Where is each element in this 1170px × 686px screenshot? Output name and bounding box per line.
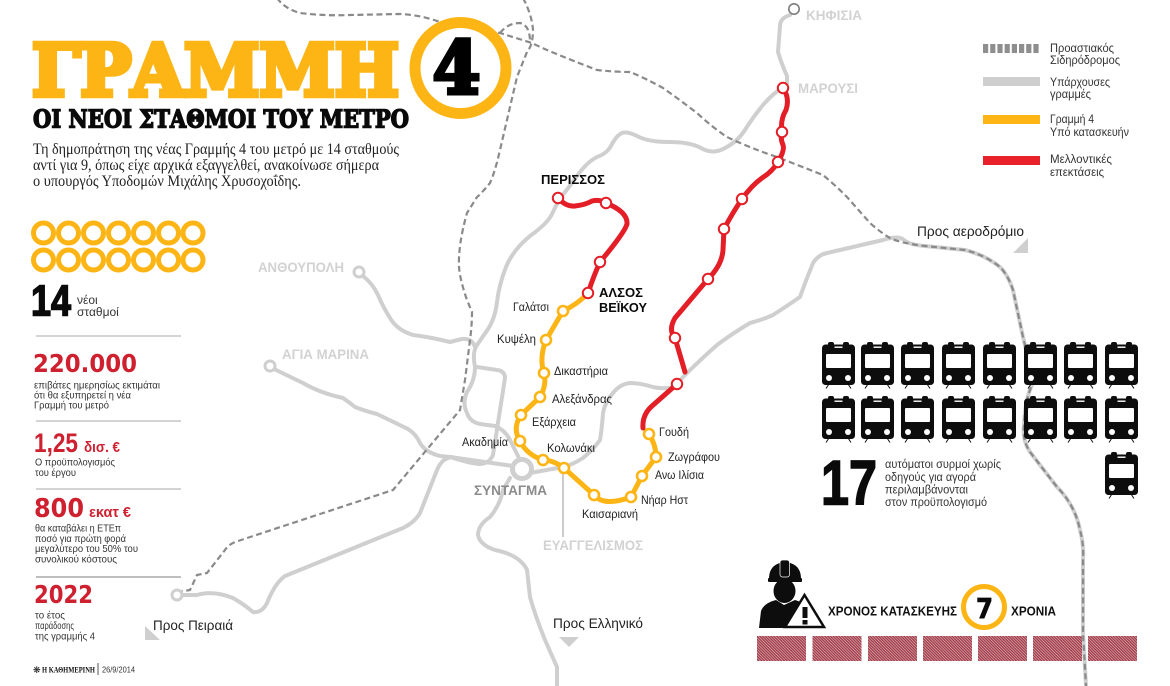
legend: Προαστιακός	[1050, 43, 1114, 55]
years label: ΧΡΟΝΙΑ	[1011, 604, 1056, 618]
stat: 1,25 bn budget: δισ. €	[84, 439, 121, 456]
map station labels: ΑΓΙΑ ΜΑΡΙΝΑ	[282, 346, 369, 362]
leader line: Evangelismos	[562, 470, 564, 537]
label: Peiraias direction with arrow	[145, 617, 233, 640]
map: future extensions (red)	[553, 83, 788, 428]
legend: Σιδηρόδρομος	[1050, 55, 1120, 67]
map station labels: Γουδή	[659, 425, 689, 439]
subtitle: ΟΙ ΝΕΟΙ ΣΤΑΘΜΟΙ ΤΟΥ ΜΕΤΡΟ	[33, 104, 409, 134]
ring with number 7: 7	[976, 592, 993, 625]
map station labels: Αλεξάνδρας	[552, 392, 612, 406]
map: Line 4 under construction (yellow)	[515, 293, 661, 502]
stat: 220.000 passengers: επιβάτες ημερησίως εκτιμάται	[34, 380, 161, 392]
seven year blocks	[757, 636, 1137, 661]
stat: 17 automatic trains: περιλαμβάνονται	[885, 482, 968, 496]
stat: 220.000 passengers: ότι θα εξυπηρετεί η νέα	[34, 390, 131, 402]
map station labels: ΠΕΡΙΣΣΟΣ	[541, 173, 606, 187]
icon: construction worker with warning sign	[759, 560, 824, 628]
map: existing metro lines	[181, 15, 1086, 686]
map station labels: ΚΗΦΙΣΙΑ	[806, 7, 862, 23]
footer: newspaper credit: 26/9/2014	[102, 664, 135, 674]
stat: 800 million: θα καταβάλει η ΕΤΕπ	[35, 522, 121, 534]
map station labels: Κολωνάκι	[547, 441, 595, 455]
stat: 800 million: 800	[34, 494, 84, 524]
footer: newspaper credit: Η ΚΑΘΗΜΕΡΙΝΗ	[42, 664, 95, 674]
stat: 1,25 bn budget: 1,25	[34, 428, 78, 458]
stat: 800 million: εκατ €	[89, 504, 132, 521]
stat: 17 automatic trains: αυτόματοι συρμοί χωρίς	[885, 457, 1001, 471]
label: Peiraias direction with arrow: Προς Πειραιά	[153, 617, 233, 633]
label: airport direction with arrow	[917, 223, 1028, 253]
map station labels: Καισαριανή	[582, 507, 638, 521]
intro paragraph: αντί για 9, όπως είχε αρχικά εξαγγελθεί, ανακοίνωσε σήμερα	[33, 157, 379, 174]
map station labels: ΕΥΑΓΓΕΛΙΣΜΟΣ	[543, 537, 643, 553]
stat: 17 automatic trains: 17	[821, 448, 877, 518]
label: Elliniko direction with arrow: Προς Ελληνικό	[553, 615, 643, 631]
stat: 800 million: μεγαλύτερο του 50% του	[35, 543, 138, 555]
label: airport direction with arrow: Προς αεροδρόμιο	[917, 223, 1024, 239]
stat: 220.000 passengers: 220.000	[33, 349, 137, 378]
footer: newspaper credit	[33, 663, 135, 676]
stat: delivery year 2022	[34, 580, 95, 642]
icon group: 17 trains	[822, 342, 1138, 498]
stat: 14 new stations: 14	[31, 276, 71, 326]
stat: 1,25 bn budget	[34, 428, 121, 479]
stat: 800 million	[34, 494, 138, 566]
stat: delivery year 2022: το έτος	[35, 610, 65, 622]
icon: 14 station rings	[34, 223, 203, 270]
map station labels: ΑΝΘΟΥΠΟΛΗ	[258, 259, 344, 275]
map station labels: ΜΑΡΟΥΣΙ	[798, 80, 858, 96]
footer: newspaper credit: ❋	[33, 666, 41, 676]
legend: Υπό κατασκευήν	[1050, 127, 1129, 139]
legend: Γραμμή 4	[1050, 114, 1095, 126]
map station labels: Ακαδημία	[462, 435, 508, 449]
map: suburban railway dashed lines	[178, 0, 1086, 686]
stat: 220.000 passengers	[33, 349, 161, 412]
map station labels	[258, 7, 862, 553]
stat: 17 automatic trains: οδηγούς για αγορά	[885, 470, 976, 484]
map station labels: ΣΥΝΤΑΓΜΑ	[474, 482, 547, 498]
legend: Υπάρχουσες	[1050, 77, 1110, 89]
stat: delivery year 2022: της γραμμής 4	[35, 630, 95, 642]
stat: 14 new stations: νέοι	[77, 293, 98, 307]
stat: 14 new stations	[31, 276, 119, 326]
map station labels: Ζωγράφου	[668, 450, 720, 464]
stat: 17 automatic trains: στον προϋπολογισμό	[885, 495, 987, 509]
legend: επεκτάσεις	[1050, 167, 1104, 179]
legend: γραμμές	[1050, 89, 1091, 101]
map station labels: ΒΕΪΚΟΥ	[599, 300, 647, 315]
title ring with number 4: 4	[432, 26, 480, 112]
terminal stations of existing lines	[172, 4, 799, 600]
intro paragraph: ο υπουργός Υποδομών Μιχάλης Χρυσοχοΐδης.	[33, 173, 301, 190]
map station labels: Ανω Ιλίσια	[655, 468, 704, 482]
stat: 800 million: ποσό για πρώτη φορά	[35, 533, 126, 545]
station: Syntagma hub	[512, 460, 532, 478]
map station labels: Κυψέλη	[497, 332, 536, 346]
stat: 1,25 bn budget: του έργου	[35, 467, 76, 479]
title: ΓΡΑΜΜΗ	[32, 28, 399, 112]
stat: 800 million: συνολικού κόστους	[35, 554, 117, 566]
legend	[983, 43, 1129, 179]
title ring with number 4	[415, 22, 506, 114]
intro paragraph: Τη δημοπράτηση της νέας Γραμμής 4 του μετρό με 14 σταθμούς	[33, 141, 399, 158]
map station labels: Δικαστήρια	[554, 364, 608, 378]
stat: 14 new stations: σταθμοί	[77, 305, 119, 319]
intro paragraph	[33, 141, 399, 190]
stat: 1,25 bn budget: Ο προϋπολογισμός	[35, 456, 115, 468]
ring with number 7	[964, 586, 1004, 628]
map station labels: ΑΛΣΟΣ	[599, 285, 643, 300]
label: Elliniko direction with arrow	[553, 615, 643, 647]
stat: delivery year 2022: παράδοσης	[35, 620, 74, 632]
construction time label: ΧΡΟΝΟΣ ΚΑΤΑΣΚΕΥΗΣ	[828, 604, 957, 618]
map station labels: Νήαρ Ηστ	[641, 493, 688, 507]
stat: 17 automatic trains	[821, 448, 1001, 518]
stat: 220.000 passengers: Γραμμή του μετρό	[34, 400, 109, 412]
legend: Μελλοντικές	[1050, 154, 1112, 166]
map station labels: Γαλάτσι	[513, 300, 549, 314]
map station labels: Εξάρχεια	[532, 415, 576, 429]
stat: delivery year 2022: 2022	[34, 580, 93, 609]
